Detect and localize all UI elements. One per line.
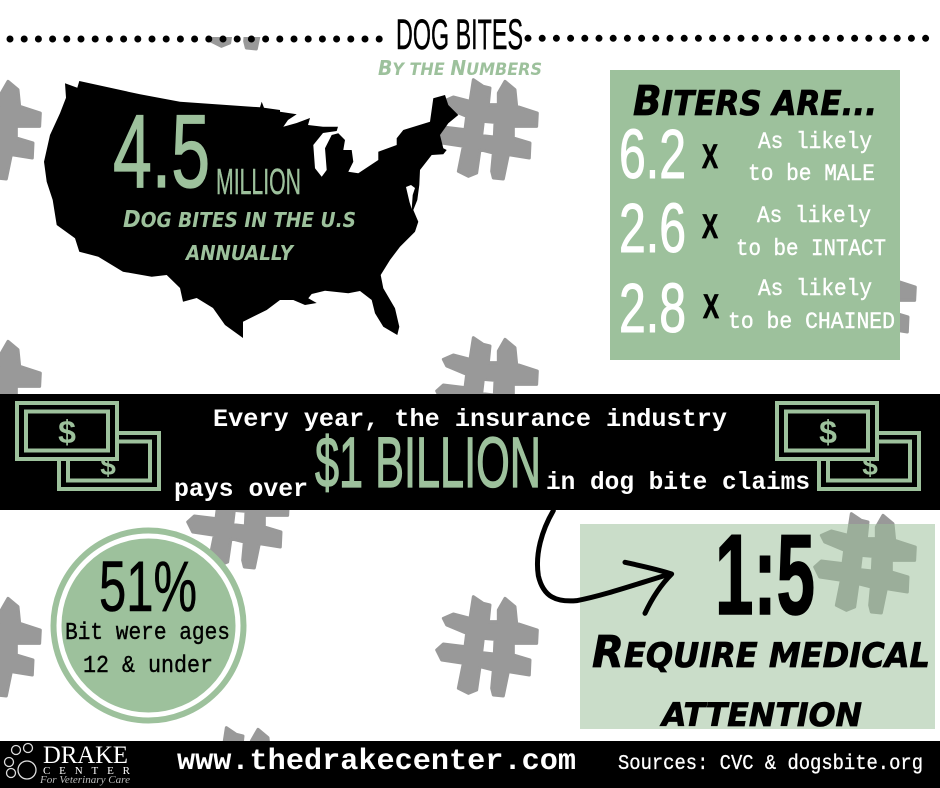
arrow — [537, 511, 672, 613]
circle fill — [62, 538, 236, 712]
row: chained: As likely — [758, 276, 872, 302]
row: intact: to be INTACT — [736, 236, 886, 262]
stat unit: million: MILLION — [216, 161, 301, 202]
circle ring — [54, 530, 244, 720]
stat: 1:5: 1:5 — [715, 512, 815, 639]
panel background — [580, 524, 935, 729]
circle: 51% — [54, 530, 244, 720]
panel background — [610, 70, 900, 360]
logo paw icon — [4, 744, 36, 779]
icon: money left: $ — [58, 414, 76, 450]
row: male: X — [702, 138, 718, 176]
caption line 2: ATTENTION — [659, 696, 862, 734]
panel: 1 in 5 — [580, 512, 935, 734]
row: intact — [619, 189, 886, 267]
footer — [0, 741, 940, 788]
band text: in dog bite claims: in dog bite claims — [546, 468, 810, 497]
caption: DOG BITES IN THE U.S — [123, 207, 356, 233]
dotted title rule — [10, 35, 938, 42]
row: intact: X — [702, 208, 718, 246]
row: chained: X — [703, 288, 719, 326]
caption line 2: ANNUALLY — [184, 241, 295, 265]
insurance band — [0, 394, 940, 510]
band stat: $1 billion: $1 BILLION — [315, 424, 541, 503]
logo name: DRAKE — [43, 742, 128, 769]
caption: REQUIRE MEDICAL — [592, 627, 930, 678]
website: www.thedrakecenter.com — [177, 745, 576, 779]
logo word: center: CENTER — [43, 765, 131, 777]
row: chained — [619, 269, 895, 347]
band text: pays over: pays over — [174, 475, 308, 504]
circle stat: 51% — [99, 548, 197, 627]
icon: money right — [775, 401, 919, 489]
subtitle: BY THE NUMBERS — [378, 56, 542, 80]
logo tagline: For Veterinary Care — [39, 775, 131, 786]
row: male: to be MALE — [748, 161, 875, 187]
icon: money left — [15, 401, 159, 489]
circle caption line 2: 12 & under — [83, 653, 213, 680]
circle caption: Bit were ages — [65, 620, 230, 647]
band background — [0, 394, 940, 510]
row: male: 6.2 — [619, 115, 686, 193]
stat: 4.5: 4.5 — [113, 94, 210, 210]
band text line 1: Every year, the insurance industry — [213, 405, 727, 434]
icon: money right: $ — [819, 414, 837, 450]
row: male: As likely — [758, 129, 872, 155]
header white backing — [0, 0, 940, 37]
title: DOG BITES — [396, 11, 523, 59]
logo — [4, 742, 131, 786]
row: chained: 2.8 — [619, 269, 686, 347]
row: intact: 2.6 — [619, 189, 686, 267]
panel heading: BITERS ARE... — [633, 77, 877, 125]
footer background — [0, 741, 940, 788]
row: intact: As likely — [757, 203, 871, 229]
row: chained: to be CHAINED — [728, 309, 895, 335]
US map silhouette — [44, 81, 458, 338]
icon: money right: $ — [862, 450, 878, 481]
panel: biters are — [610, 70, 900, 360]
map panel: US bites — [44, 81, 458, 338]
row: male — [619, 115, 875, 193]
icon: money left: $ — [100, 450, 116, 481]
